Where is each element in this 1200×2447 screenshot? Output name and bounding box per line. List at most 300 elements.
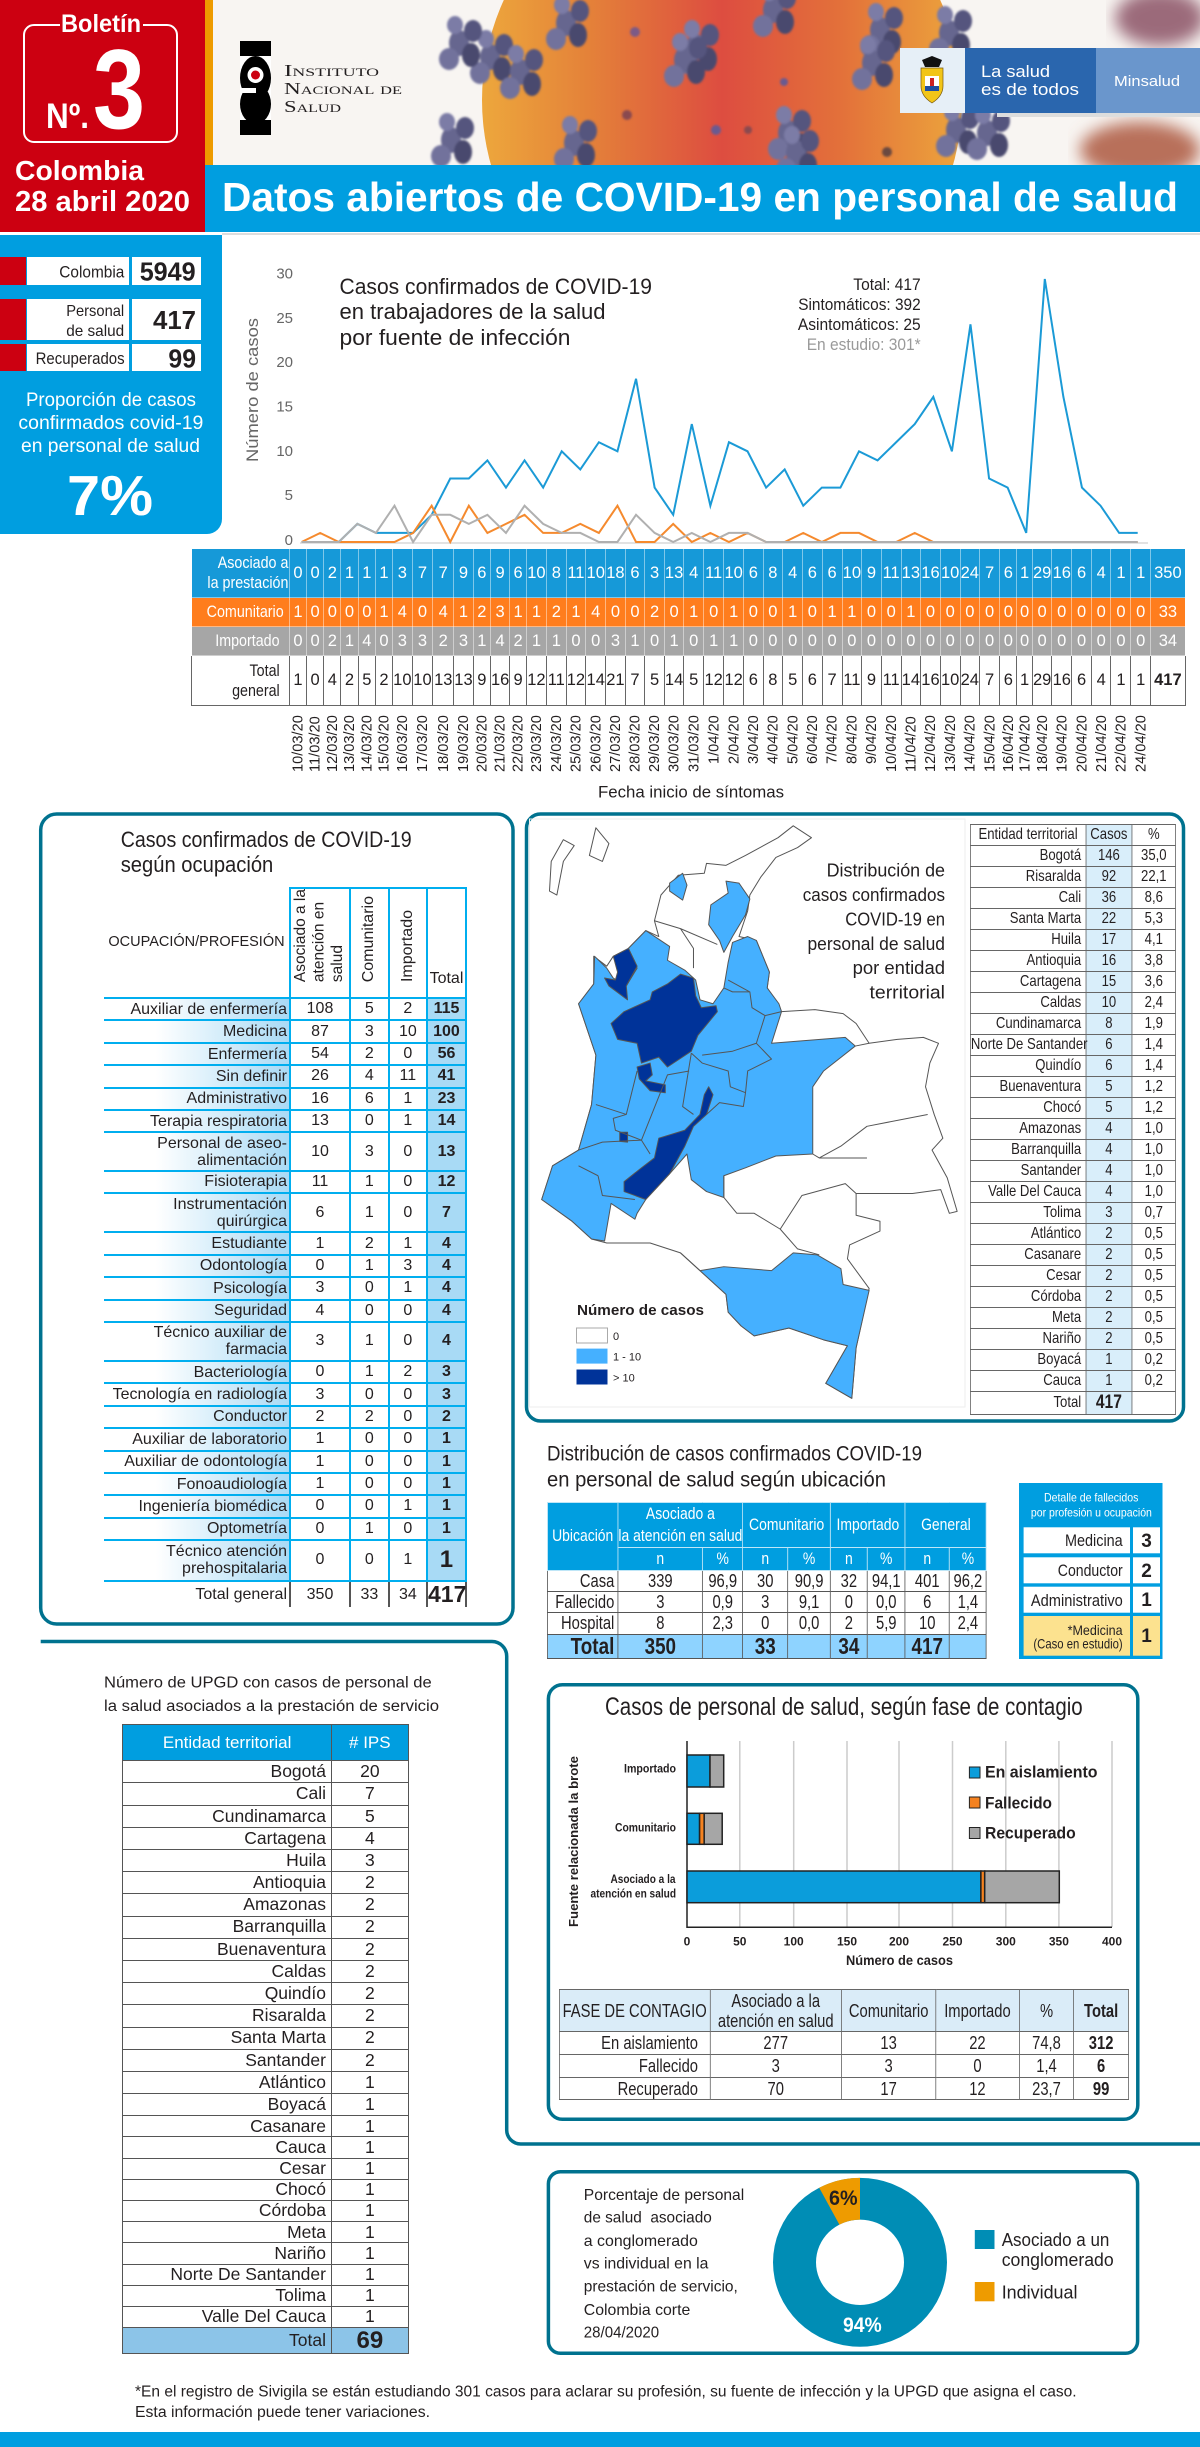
territorial cases table: 0,5 [1145, 1246, 1163, 1263]
stat: personal de salud [0, 299, 201, 340]
phase table: 22 [969, 2033, 986, 2053]
stacked bar chart [566, 1741, 1122, 1968]
table: cases per day by source: 3 [398, 632, 407, 650]
phase table: 3 [772, 2056, 780, 2076]
UPGD table: 5 [365, 1806, 375, 1826]
territorial cases table: % [1148, 826, 1160, 843]
occupation table: Bacteriología [194, 1364, 287, 1381]
date axis labels: 25/03/20 [568, 715, 584, 772]
table: cases per day by source: 0 [808, 632, 817, 650]
red bulletin block [0, 0, 205, 232]
UPGD table: 2 [365, 1939, 375, 1959]
panel: cases by occupation [38, 812, 515, 1626]
date axis labels: 4/04/20 [766, 715, 782, 764]
stacked bar chart: 200 [889, 1935, 909, 1949]
phase table: 23,7 [1032, 2079, 1061, 2099]
occupation table: 33 [360, 1586, 378, 1603]
table: cases per day by source: 6 [808, 671, 817, 689]
UPGD table: Cauca [275, 2137, 326, 2157]
table: cases per day by source: 2 [477, 603, 486, 621]
y axis labels: 30 [276, 266, 293, 282]
proportion value: 7% [67, 464, 153, 528]
stacked bar chart: Comunitario [615, 1821, 676, 1835]
territorial cases table: 1 [1105, 1372, 1113, 1389]
UPGD table: 1 [365, 2094, 375, 2114]
table: cases per day by source: 5 [689, 671, 698, 689]
occupation table: 4 [442, 1302, 451, 1319]
UPGD table: Tolima [275, 2285, 326, 2305]
table: cases per day by source: 14 [902, 671, 920, 689]
table: cases per day by source: 10 [724, 564, 743, 582]
phase table: 99 [1093, 2079, 1109, 2099]
table: cases per day by source: 6 [749, 564, 758, 582]
chart title: en trabajadores de la salud [340, 299, 606, 324]
occupation table: 0 [403, 1173, 412, 1190]
occupation table: Auxiliar de enfermería [130, 1001, 287, 1018]
occupation table: 1 [403, 1497, 412, 1514]
occupation table: 0 [365, 1386, 374, 1403]
donut legend: Individual [1002, 2282, 1078, 2302]
occupation table: Asociado a la [292, 889, 309, 982]
location table: Hospital [561, 1613, 614, 1633]
panel: deaths by occupation: por profesión u ocupación [1031, 1506, 1152, 1520]
panel: cluster vs individual donut [546, 2170, 1140, 2355]
UPGD table: Nariño [274, 2243, 326, 2263]
table: cases per day by source: 1 [345, 564, 354, 582]
location table: 8 [656, 1613, 664, 1633]
UPGD table: 1 [365, 2243, 375, 2263]
location table: 417 [912, 1633, 943, 1659]
panel: deaths by occupation: 1 [1141, 1590, 1152, 1611]
phase table: 17 [880, 2079, 897, 2099]
summary counts: Asintomáticos: 25 [798, 315, 921, 334]
table: cases per day by source: 0 [965, 632, 974, 650]
occupation table: Personal de aseo- [157, 1135, 287, 1152]
date axis labels: 2/04/20 [726, 715, 742, 764]
territorial cases table: 2 [1105, 1246, 1113, 1263]
table: cases per day by source: 0 [1004, 632, 1013, 650]
territorial cases table: 146 [1098, 847, 1120, 864]
occupation table: 0 [403, 1045, 412, 1062]
stat: personal de salud: Personal [66, 303, 124, 320]
location table: 0,9 [712, 1592, 733, 1612]
occupation table: 0 [403, 1408, 412, 1425]
table: cases per day by source: 11 [843, 671, 860, 689]
panel: cases by contagion phase [546, 1683, 1140, 2121]
table: cases per day by source: 1 [689, 603, 698, 621]
panel: deaths by occupation [1019, 1483, 1162, 1659]
location table: % [803, 1549, 815, 1568]
map legend: Número de casos [577, 1302, 704, 1319]
occupation table: 1 [403, 1112, 412, 1129]
UPGD table: Boyacá [268, 2094, 326, 2114]
panel: UPGD by territorial entity [40, 1640, 1200, 2354]
occupation table: 0 [316, 1497, 324, 1514]
occupation table: Odontología [200, 1257, 287, 1274]
occupation table: 0 [365, 1497, 374, 1514]
location table: % [717, 1549, 729, 1568]
orange strip [205, 0, 213, 165]
title bar [205, 165, 1200, 232]
phase table: 13 [880, 2033, 897, 2053]
panel: deaths by occupation: 3 [1141, 1531, 1152, 1552]
location table: 0,0 [799, 1613, 819, 1633]
table: cases per day by source: 1 [362, 564, 371, 582]
table: cases per day by source: 29 [1033, 564, 1051, 582]
y axis labels: 0 [285, 532, 293, 549]
table: cases per day by source: 10 [413, 671, 432, 689]
table: cases per day by source: 4 [788, 564, 797, 582]
territorial cases table: 1,4 [1145, 1036, 1163, 1053]
table: cases per day by source: 1 [1020, 564, 1029, 582]
table: cases per day by source: 16 [1053, 671, 1071, 689]
UPGD table: 7 [365, 1783, 375, 1803]
territorial cases table: 22,1 [1141, 868, 1167, 885]
territorial cases table: 8 [1105, 1015, 1113, 1032]
table: cases per day by source: 0 [808, 603, 817, 621]
UPGD table: Chocó [275, 2179, 326, 2199]
UPGD table: 2 [365, 1916, 375, 1936]
date axis labels: 24/03/20 [549, 715, 565, 772]
stacked bar chart: 400 [1102, 1935, 1122, 1949]
table: cases per day by source: 1 [788, 603, 797, 621]
table: cases per day by source: 1 [514, 603, 523, 621]
phase table: FASE DE CONTAGIO [563, 2001, 707, 2021]
table: cases per day by source: 0 [1077, 632, 1086, 650]
table: cases per day by source: 3 [650, 564, 659, 582]
series lines [302, 279, 1138, 542]
occupation table: 10 [311, 1143, 329, 1160]
table: cases per day by source: 12 [724, 671, 743, 689]
footnote: Esta información puede tener variaciones. [135, 2404, 430, 2421]
table: cases per day by source: 1 [293, 671, 303, 689]
donut description: prestación de servicio, [584, 2279, 738, 2296]
location table: Total [571, 1633, 614, 1659]
table: cases per day by source: 1 [552, 632, 561, 650]
chart title: por fuente de infección [340, 325, 570, 350]
stat: Colombia [0, 257, 201, 287]
stacked bar chart: Fuente relacionada la brote [566, 1756, 581, 1927]
occupation table: 1 [403, 1235, 412, 1252]
table: cases per day by source: 14 [587, 671, 605, 689]
table: cases per day by source: 0 [887, 603, 896, 621]
territorial cases table: Santander [1021, 1162, 1081, 1179]
territorial cases table: 0,2 [1145, 1351, 1163, 1368]
UPGD table: Santa Marta [231, 2027, 326, 2047]
table: cases per day by source: 0 [1097, 632, 1106, 650]
occupation table: salud [329, 945, 346, 982]
logo: Instituto Nacional de Salud: Instituto [284, 61, 379, 80]
date axis labels: 31/03/20 [686, 715, 702, 772]
red bulletin block: Nº. [46, 97, 89, 136]
table: cases per day by source: 0 [571, 632, 581, 650]
table: cases per day by source: 1 [379, 564, 389, 582]
phase table: Importado [944, 2001, 1011, 2021]
territorial cases table: 0,7 [1145, 1204, 1163, 1221]
table: cases per day by source: 9 [867, 564, 876, 582]
table: cases per day by source: 10 [527, 564, 546, 582]
occupation table: Fisioterapia [204, 1173, 287, 1190]
territorial cases table: Cartagena [1020, 973, 1081, 990]
territorial cases table: Barranquilla [1011, 1141, 1081, 1158]
occupation table: 87 [311, 1023, 329, 1040]
logo: Instituto Nacional de Salud [240, 41, 402, 135]
territorial cases table: 1,9 [1145, 1015, 1163, 1032]
territorial cases table: 3,6 [1145, 973, 1163, 990]
UPGD table: Córdoba [259, 2200, 326, 2220]
territorial cases table: 4,1 [1145, 931, 1163, 948]
stat: recuperados [0, 343, 201, 373]
occupation table: 1 [316, 1235, 324, 1252]
date axis labels: 18/03/20 [436, 715, 452, 772]
table: cases per day by source: 2 [650, 603, 659, 621]
occupation table: 1 [316, 1453, 324, 1470]
UPGD table: 2 [365, 2027, 375, 2047]
table: cases per day by source: 8 [552, 564, 561, 582]
occupation table: 1 [442, 1430, 451, 1447]
table: cases per day by source: 1 [729, 632, 738, 650]
table: cases per day by source: 0 [985, 632, 994, 650]
date axis labels: 27/03/20 [608, 715, 624, 772]
date axis labels: 10/04/20 [884, 715, 900, 772]
date axis labels: 11/04/20 [904, 716, 920, 772]
phase table: 12 [969, 2079, 986, 2099]
table: cases per day by source: 21 [606, 671, 625, 689]
date axis labels: 7/04/20 [825, 715, 841, 764]
stat: Colombia: Colombia [59, 263, 125, 282]
panel: map and territorial table [524, 812, 1186, 1423]
location table: 6 [923, 1592, 931, 1612]
date axis labels: 17/04/20 [1017, 715, 1033, 772]
table: cases per day by source: 0 [328, 603, 337, 621]
territorial cases table: 15 [1102, 973, 1116, 990]
date axis labels: 1/04/20 [706, 715, 722, 764]
table: cases per day by source: 6 [1004, 671, 1013, 689]
location table: n [656, 1549, 664, 1568]
territorial cases table: 5 [1105, 1078, 1113, 1095]
logo: Minsalud: es de todos [981, 80, 1079, 99]
table: cases per day by source: 0 [1097, 603, 1106, 621]
occupation table: 0 [403, 1332, 412, 1349]
date axis labels: 26/03/20 [588, 715, 604, 772]
location table: Casa [580, 1571, 614, 1591]
phase table: 1,4 [1036, 2056, 1057, 2076]
table: cases per day by source: 1 [532, 632, 541, 650]
panel: cases by location: en personal de salud según ubicación [547, 1469, 886, 1492]
location table: 90,9 [795, 1571, 823, 1591]
date axis labels: 18/04/20 [1035, 715, 1051, 772]
territorial cases table: 0,5 [1145, 1288, 1163, 1305]
occupation table: 417 [428, 1581, 466, 1607]
donut description [584, 2187, 744, 2342]
table: cases per day by source: 6 [749, 671, 758, 689]
phase table: 3 [885, 2056, 893, 2076]
occupation table: 1 [365, 1204, 374, 1221]
map title: Distribución de [827, 860, 945, 880]
table: cases per day by source: 6 [477, 564, 486, 582]
territorial cases table: Amazonas [1019, 1120, 1081, 1137]
location table: % [880, 1549, 892, 1568]
occupation table: Sin definir [216, 1068, 287, 1085]
stat: recuperados: Recuperados [36, 349, 125, 368]
UPGD table: 1 [365, 2158, 375, 2178]
occupation table: 34 [399, 1586, 417, 1603]
table: cases per day by source: 2 [514, 632, 523, 650]
donut legend [975, 2230, 1114, 2302]
territorial cases table: 35,0 [1141, 847, 1167, 864]
table: cases per day by source: 1 [630, 632, 640, 650]
territorial cases table: 6 [1105, 1036, 1113, 1053]
occupation table: 0 [403, 1475, 412, 1492]
table: cases per day by source: 0 [362, 603, 371, 621]
line chart: cases by onset date [243, 266, 1148, 549]
table: cases per day by source: 0 [887, 632, 896, 650]
table: cases per day by source: 1 [906, 603, 915, 621]
occupation table: 1 [365, 1257, 374, 1274]
table: cases per day by source: 16 [491, 671, 509, 689]
table: cases per day by source: 1 [1116, 671, 1126, 689]
UPGD table: 2 [365, 1983, 375, 2003]
x axis title: Fecha inicio de síntomas [598, 784, 784, 802]
occupation table: Optometría [207, 1520, 287, 1537]
table: cases per day by source: 6 [1077, 671, 1086, 689]
stacked bar chart: Número de casos [846, 1953, 953, 1968]
UPGD table: Cesar [279, 2158, 326, 2178]
table: cases per day by source: 0 [768, 603, 777, 621]
stacked bar chart: 300 [996, 1935, 1016, 1949]
phase table: Total [1084, 2001, 1118, 2021]
territorial cases table: 3,8 [1145, 952, 1163, 969]
chart legend: Fallecido [985, 1793, 1052, 1812]
UPGD table: Santander [245, 2050, 326, 2070]
territorial cases table: 1,0 [1145, 1120, 1163, 1137]
occupation table: 115 [434, 1000, 459, 1017]
occupation table: 1 [442, 1497, 451, 1514]
stacked bar chart: 250 [942, 1935, 963, 1949]
location table: Importado [836, 1515, 899, 1534]
occupation table: 4 [316, 1302, 324, 1319]
occupation table: 0 [403, 1453, 412, 1470]
table: cases per day by source: 4 [689, 564, 698, 582]
territorial cases table: 5,3 [1145, 910, 1163, 927]
location table: 30 [757, 1571, 773, 1591]
occupation table: 6 [316, 1204, 324, 1221]
table: cases per day by source: 7 [439, 564, 448, 582]
table: cases per day by source: 8 [768, 671, 777, 689]
UPGD table: 2 [365, 1894, 375, 1914]
territorial cases table: 4 [1105, 1120, 1113, 1137]
UPGD table: Cundinamarca [212, 1806, 326, 1826]
panel: deaths by occupation: Administrativo [1031, 1591, 1123, 1610]
occupation table: Ingeniería biomédica [138, 1498, 287, 1515]
occupation table: 26 [311, 1067, 329, 1084]
panel: key figures [0, 233, 1200, 534]
map title: COVID-19 en [845, 910, 945, 930]
UPGD table: 1 [365, 2306, 375, 2326]
location table: 2,3 [712, 1613, 733, 1633]
table: cases per day by source: 0 [906, 632, 915, 650]
table: cases per day by source: 10 [843, 564, 861, 582]
table: cases per day by source: 9 [459, 564, 468, 582]
occupation table: Técnico atención [166, 1543, 287, 1560]
UPGD table: Valle Del Cauca [202, 2306, 326, 2326]
table: cases per day by source: 0 [1136, 603, 1145, 621]
phase table [559, 1989, 1129, 2100]
table: cases per day by source: 6 [1077, 564, 1086, 582]
territorial cases table: Buenaventura [999, 1078, 1081, 1095]
table: cases per day by source: 7 [985, 564, 994, 582]
stacked bar chart: 100 [784, 1935, 804, 1949]
stacked bar chart: 350 [1049, 1935, 1069, 1949]
table: cases per day by source: 10 [393, 671, 412, 689]
territorial cases table: 16 [1102, 952, 1116, 969]
table: cases per day by source: 6 [514, 564, 523, 582]
table: cases per day by source [191, 549, 1186, 706]
occupation table: 3 [403, 1257, 412, 1274]
UPGD table: 2 [365, 1872, 375, 1892]
table: cases per day by source: 0 [345, 603, 354, 621]
territorial cases table: 5 [1105, 1099, 1113, 1116]
table: cases per day by source: 18 [606, 564, 625, 582]
occupation table: Seguridad [214, 1302, 287, 1319]
territorial cases table: 1 [1105, 1351, 1113, 1368]
table: cases per day by source: 5 [362, 671, 371, 689]
table: cases per day by source: 3 [496, 603, 505, 621]
UPGD table: # IPS [349, 1733, 391, 1752]
date axis labels: 14/04/20 [962, 715, 978, 772]
UPGD table: 1 [365, 2200, 375, 2220]
occupation table: 3 [365, 1143, 374, 1160]
table: cases per day by source: 2 [345, 671, 354, 689]
table: cases per day by source: 4 [439, 603, 448, 621]
table: cases per day by source: 0 [418, 603, 427, 621]
territorial cases table: Nariño [1043, 1330, 1081, 1347]
location table: 94,1 [872, 1571, 901, 1591]
territorial cases table: Boyacá [1037, 1351, 1081, 1368]
y axis labels: 15 [276, 399, 293, 416]
occupation table: 7 [442, 1204, 451, 1221]
table: cases per day by source: 10 [941, 671, 959, 689]
table: cases per day by source: 3 [611, 632, 620, 650]
occupation table: 11 [400, 1067, 416, 1084]
date axis labels: 5/04/20 [785, 715, 801, 764]
occupation table: 4 [365, 1067, 374, 1084]
occupation table: 0 [365, 1551, 374, 1568]
table: cases per day by source: 2 [328, 564, 337, 582]
stat: recuperados: 99 [168, 343, 196, 373]
location table [547, 1502, 987, 1659]
table: cases per day by source: 2 [379, 671, 389, 689]
occupation table: Instrumentación [173, 1196, 287, 1213]
occupation table: 0 [403, 1430, 412, 1447]
occupation table: 5 [365, 1000, 374, 1017]
table: cases per day by source: 9 [514, 671, 523, 689]
occupation table: 0 [365, 1112, 374, 1129]
donut description: 28/04/2020 [584, 2325, 659, 2342]
panel: UPGD by territorial entity: Número de UPGD con casos de personal de [104, 1674, 432, 1692]
donut chart: 6% [829, 2187, 858, 2210]
title bar: Datos abiertos de COVID-19 en personal de salud [222, 174, 1178, 220]
occupation table: 6 [365, 1090, 374, 1107]
y axis labels: 25 [276, 310, 293, 327]
table: cases per day by source: 0 [1020, 632, 1029, 650]
location table: 2 [845, 1613, 853, 1633]
table: cases per day by source: 0 [1020, 603, 1029, 621]
logo: Minsalud: Minsalud [1114, 73, 1180, 90]
table: cases per day by source: 4 [328, 671, 337, 689]
table: cases per day by source: 13 [454, 671, 473, 689]
table: cases per day by source: 0 [311, 632, 320, 650]
